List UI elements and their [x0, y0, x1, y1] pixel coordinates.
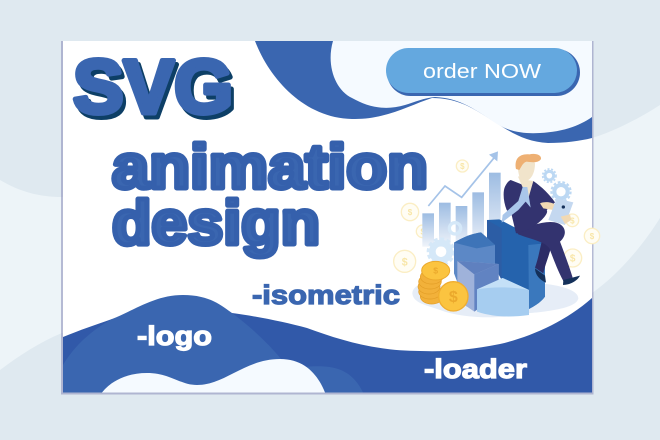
back leg: [535, 238, 552, 273]
large gold coin: [439, 282, 468, 311]
gears: [428, 169, 571, 265]
button: order NOW: [386, 48, 580, 96]
faint dollar coins: [394, 160, 600, 272]
title: SVG: SVG: [73, 45, 233, 130]
title: SVG: SVG: [76, 49, 236, 134]
illustration: businessman on isometric charts: $: [590, 232, 595, 241]
mid pie segment: [457, 261, 499, 312]
front pie segment: [477, 278, 529, 316]
bar chart: [422, 173, 501, 247]
hand on tablet: [561, 214, 571, 224]
bottom right hump: [300, 366, 363, 392]
top light wave: [331, 41, 592, 133]
businessman: [502, 154, 580, 285]
ground shadow: [412, 283, 578, 317]
shoes: [535, 268, 580, 285]
head: [518, 160, 535, 181]
illustration: businessman on isometric charts: $: [449, 289, 458, 306]
tie and scarf: [502, 187, 531, 223]
front leg: [515, 222, 573, 281]
illustration: businessman on isometric charts: $: [420, 227, 425, 236]
jacket: [504, 180, 555, 233]
gold coin stack: [418, 269, 443, 304]
label: -loader: -loader: [424, 354, 528, 384]
hair: [516, 154, 541, 170]
arm and hand: [540, 202, 555, 210]
blue cylinder segment: [487, 219, 545, 309]
illustration: businessman on isometric charts: $: [570, 254, 576, 265]
illustration: businessman on isometric charts: [394, 151, 600, 317]
illustration: businessman on isometric charts: $: [408, 208, 413, 217]
trend arrow: [428, 157, 495, 206]
tablet: [548, 198, 573, 225]
heading: animation design: design: [112, 189, 320, 258]
shirt and neck: [518, 175, 533, 198]
label: -logo: -logo: [137, 321, 212, 351]
panel: white card: [61, 41, 594, 394]
illustration: businessman on isometric charts: $: [433, 265, 438, 275]
heading: animation design: [112, 133, 428, 258]
illustration: businessman on isometric charts: $: [402, 256, 408, 268]
bottom light blob: [102, 359, 325, 392]
bottom hump: [63, 295, 310, 392]
top blue wave: [255, 41, 592, 143]
illustration: businessman on isometric charts: $: [570, 216, 575, 225]
button: order NOW: order NOW: [423, 61, 541, 83]
label: -isometric: -isometric: [252, 280, 400, 310]
heading: animation design: animation: [112, 133, 428, 202]
bottom back wave: [63, 298, 592, 392]
illustration: businessman on isometric charts: $: [460, 162, 465, 171]
back pie segment: [454, 232, 495, 307]
